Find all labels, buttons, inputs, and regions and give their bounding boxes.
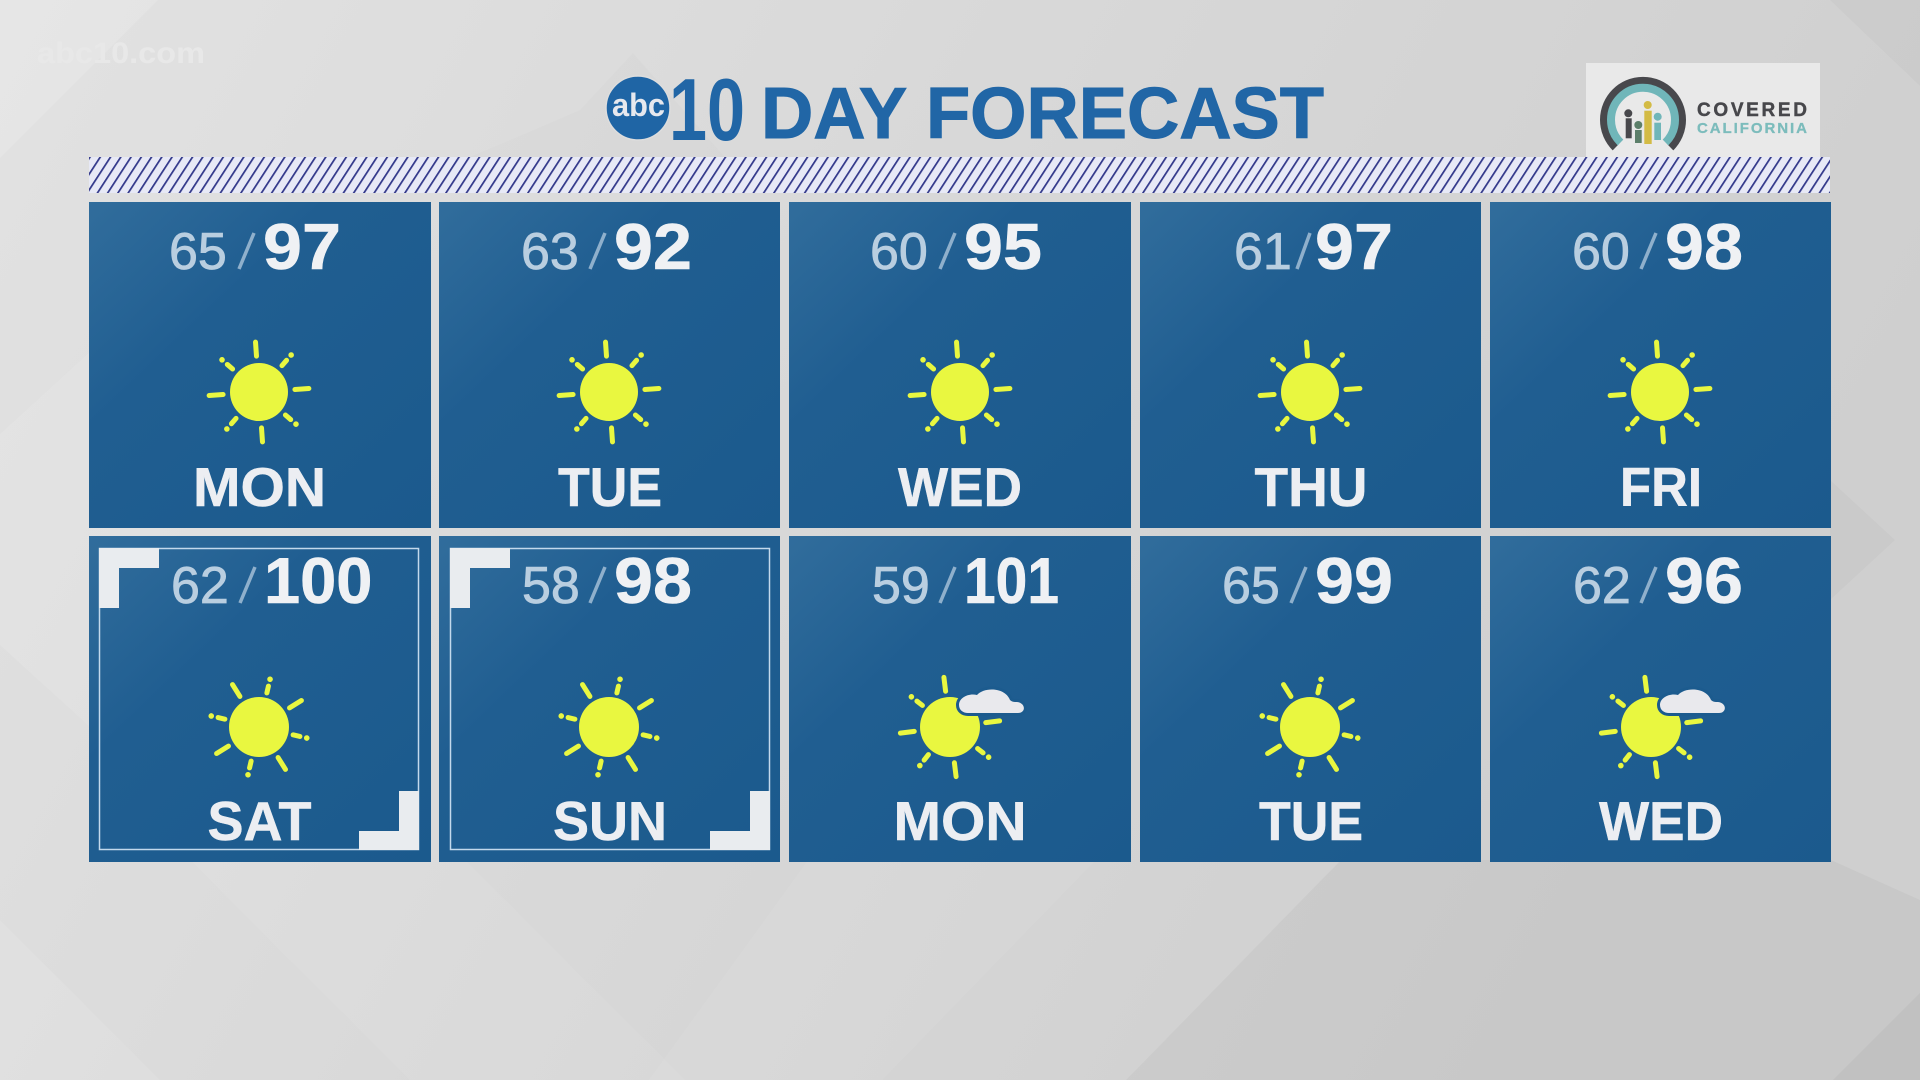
panel: Monday — [89, 202, 431, 528]
panel: Tuesday: 63 — [521, 223, 579, 281]
panel: Sunday (weekend): 58 — [522, 557, 580, 615]
panel: Tuesday: TUE — [558, 456, 662, 518]
panel: Thursday: 61 — [1234, 223, 1292, 281]
panel: next Tuesday: TUE — [1259, 790, 1363, 852]
sponsor logo: Covered California: CALIFORNIA — [1697, 120, 1807, 137]
panel: next Wednesday: 62 — [1573, 557, 1631, 615]
panel: Saturday (weekend) — [89, 536, 431, 862]
logo: abc10: abc — [612, 87, 665, 123]
panel: Tuesday — [439, 202, 780, 528]
panel: next Tuesday: 99 — [1315, 544, 1393, 617]
panel: Wednesday: WED — [898, 456, 1022, 518]
panel: next Tuesday — [1140, 536, 1481, 862]
watermark: abc10.com: abc10.com — [37, 37, 205, 70]
panel: next Monday: 101 — [964, 544, 1059, 617]
sponsor logo: Covered California: COVERED — [1697, 100, 1807, 121]
panel: Saturday (weekend): 100 — [264, 544, 372, 617]
panel: Monday: MON — [193, 456, 326, 518]
panel: Sunday (weekend): 98 — [614, 544, 692, 617]
logo: abc10 — [606, 60, 745, 159]
panel: Saturday (weekend): SAT — [208, 790, 312, 852]
panel: next Tuesday: 65 — [1222, 557, 1280, 615]
panel: Friday — [1490, 202, 1831, 528]
panel: Sunday (weekend) — [439, 536, 780, 862]
panel: Sunday (weekend): SUN — [553, 790, 667, 852]
hatched band — [89, 157, 1830, 193]
panel: next Wednesday: 96 — [1665, 544, 1743, 617]
panel: next Monday: 59 — [872, 557, 930, 615]
panel: Thursday — [1140, 202, 1481, 528]
panel: Wednesday: 60 — [870, 223, 928, 281]
panel: Tuesday: 92 — [614, 210, 692, 283]
panel: Friday: 60 — [1572, 223, 1630, 281]
panel: Saturday (weekend): 62 — [171, 557, 229, 615]
panel: Friday: 98 — [1665, 210, 1743, 283]
panel: Wednesday — [789, 202, 1131, 528]
panel: Wednesday: 95 — [964, 210, 1042, 283]
panel: Monday: 65 — [169, 223, 227, 281]
panel: next Monday: MON — [894, 790, 1026, 852]
logo: abc10: 10 — [669, 60, 745, 159]
panel: next Wednesday: WED — [1599, 790, 1723, 852]
panel: Monday: 97 — [263, 210, 341, 283]
panel: next Monday — [789, 536, 1131, 862]
title: DAY FORECAST — [761, 74, 1324, 154]
panel: Thursday: THU — [1254, 456, 1368, 518]
panel: Thursday: 97 — [1315, 210, 1393, 283]
panel: next Wednesday — [1490, 536, 1831, 862]
sponsor logo: Covered California — [1586, 63, 1820, 158]
panel: Friday: FRI — [1620, 456, 1702, 518]
